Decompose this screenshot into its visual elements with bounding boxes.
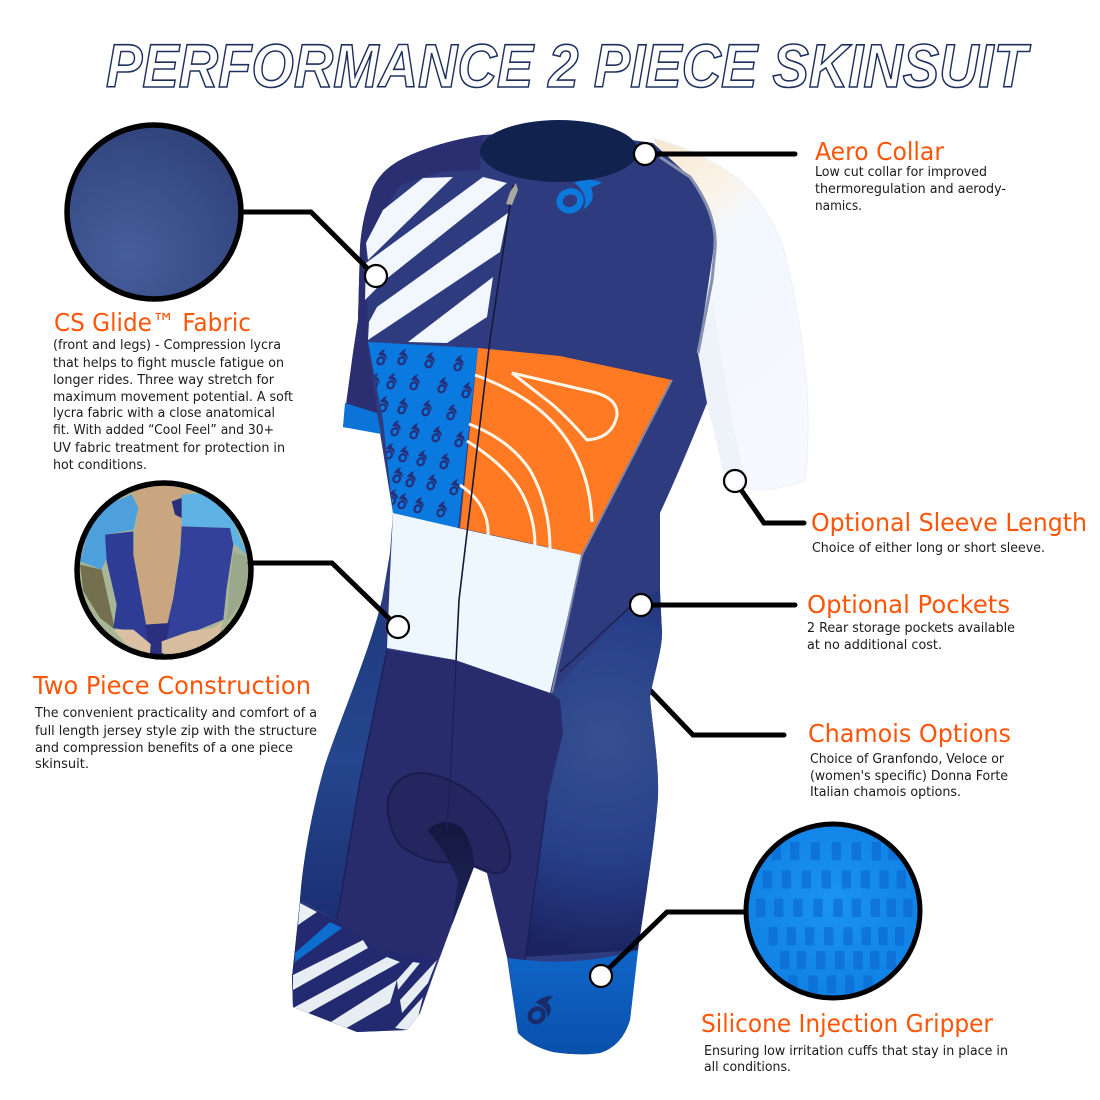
text block: cs glide fabric — [53, 308, 293, 473]
left arm — [80, 565, 115, 630]
teardrop and arcs — [460, 373, 617, 549]
left hand — [113, 630, 151, 655]
mesh cells — [756, 842, 913, 994]
callout: fabric circle — [67, 125, 241, 299]
body: that helps to fight muscle fatigue on — [53, 355, 284, 371]
heading: Optional Sleeve Length — [811, 508, 1087, 537]
text block: optional pockets — [807, 590, 1015, 653]
body: lycra fabric with a close anatomical — [53, 405, 275, 421]
marker dot: two piece — [387, 616, 409, 638]
shorts seams — [337, 607, 630, 960]
left sleeve shade — [343, 135, 483, 433]
connector: sleeve — [735, 481, 804, 523]
marker dot: collar — [634, 143, 656, 165]
heading: Two Piece Construction — [32, 671, 311, 700]
body — [53, 337, 293, 473]
right white sleeve — [653, 138, 808, 490]
heading: Silicone Injection Gripper — [701, 1009, 994, 1038]
body: longer rides. Three way stretch for — [53, 372, 274, 388]
background foliage right — [227, 551, 250, 621]
body — [34, 705, 317, 772]
text block: optional sleeve length — [811, 508, 1087, 556]
body: hot conditions. — [53, 457, 147, 473]
right jersey panel — [163, 526, 233, 641]
body: Choice of either long or short sleeve. — [812, 540, 1045, 556]
left jersey panel — [105, 531, 150, 646]
body: The convenient practicality and comfort of a — [34, 705, 317, 721]
body: Low cut collar for improved — [815, 164, 987, 180]
marker dot: sleeve — [724, 470, 746, 492]
inner thigh shadow — [427, 822, 474, 925]
text block: aero collar — [815, 137, 1006, 214]
body: (women's specific) Donna Forte — [810, 768, 1008, 784]
text block: silicone injection gripper — [701, 1009, 1008, 1075]
callout: silicone gripper circle — [746, 824, 920, 998]
center zipper — [456, 185, 513, 662]
body: at no additional cost. — [807, 637, 942, 653]
white lower chest panel — [387, 513, 582, 693]
body — [815, 164, 1006, 214]
left leg stripe gripper — [292, 903, 438, 1032]
centre shorts panel — [337, 650, 563, 960]
heading: CS Glide™ Fabric — [54, 308, 251, 337]
body: namics. — [815, 198, 862, 214]
chamois pad — [388, 773, 510, 874]
sleeve underarm shade — [698, 300, 745, 480]
left floral shoulder — [80, 495, 138, 570]
heading: Chamois Options — [808, 719, 1011, 748]
shoulder stripes — [365, 177, 508, 343]
right leg panel — [508, 590, 662, 960]
body: Choice of Granfondo, Veloce or — [810, 751, 1004, 767]
body: UV fabric treatment for protection in — [53, 440, 285, 456]
photo contents — [80, 485, 250, 655]
shorts — [145, 623, 170, 655]
cuff logo — [523, 994, 560, 1026]
callout: two piece construction photo — [77, 483, 251, 657]
connector: fabric — [243, 212, 375, 276]
repeated logo pattern — [374, 349, 472, 518]
body: and compression benefits of a one piece — [35, 740, 293, 756]
marker dot: gripper — [590, 965, 612, 987]
neck opening — [480, 120, 638, 182]
blue logo panel — [366, 342, 478, 528]
body: 2 Rear storage pockets available — [807, 620, 1015, 636]
side leg panel — [300, 600, 387, 920]
body: thermoregulation and aerody- — [815, 181, 1006, 197]
body: skinsuit. — [35, 756, 89, 772]
marker dot: pockets — [630, 594, 652, 616]
skinsuit garment — [285, 120, 808, 1054]
orange panel — [460, 348, 672, 555]
right hand — [162, 621, 223, 655]
heading: Aero Collar — [815, 137, 945, 166]
blue leg cuff — [508, 950, 638, 1054]
collar tab — [172, 498, 182, 518]
jersey and shorts base — [292, 130, 714, 1054]
right floral shoulder — [182, 493, 248, 556]
connector: two piece — [250, 563, 398, 627]
body — [810, 751, 1008, 800]
chest logo — [557, 180, 602, 213]
heading: Optional Pockets — [807, 590, 1010, 619]
connector: gripper — [601, 912, 746, 976]
zipper pull — [506, 183, 518, 205]
sleeve cuff — [343, 403, 381, 434]
body: all conditions. — [704, 1059, 791, 1075]
body — [704, 1043, 1008, 1075]
connector: collar — [645, 152, 795, 156]
body: full length jersey style zip with the structure — [35, 723, 317, 739]
text block: chamois options — [808, 719, 1011, 800]
text block: two piece construction — [32, 671, 317, 772]
body: Italian chamois options. — [810, 784, 961, 800]
raglan seam — [660, 157, 715, 353]
body: Ensuring low irritation cuffs that stay in place in — [704, 1043, 1008, 1059]
body: maximum movement potential. A soft — [53, 389, 293, 405]
body: (front and legs) - Compression lycra — [53, 337, 281, 353]
side seam — [552, 380, 672, 693]
bare back — [130, 485, 193, 626]
connector: pockets — [641, 602, 795, 608]
marker dot: fabric — [365, 265, 387, 287]
body: fit. With added “Cool Feel” and 30+ — [53, 422, 274, 438]
body — [807, 620, 1015, 653]
connector: chamois options — [648, 688, 784, 735]
